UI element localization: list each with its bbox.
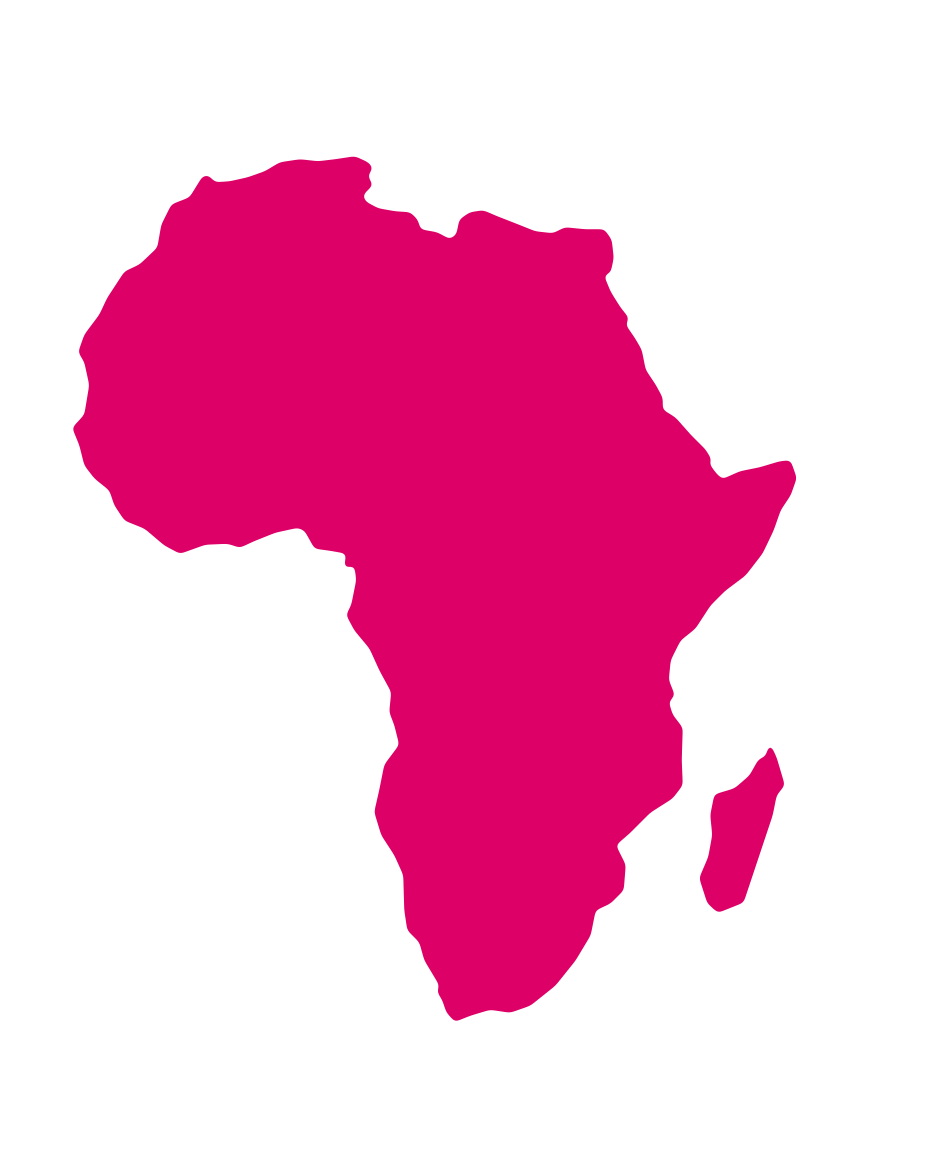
shape: Madagascar [700, 745, 784, 912]
shape: African continent [73, 157, 796, 1021]
